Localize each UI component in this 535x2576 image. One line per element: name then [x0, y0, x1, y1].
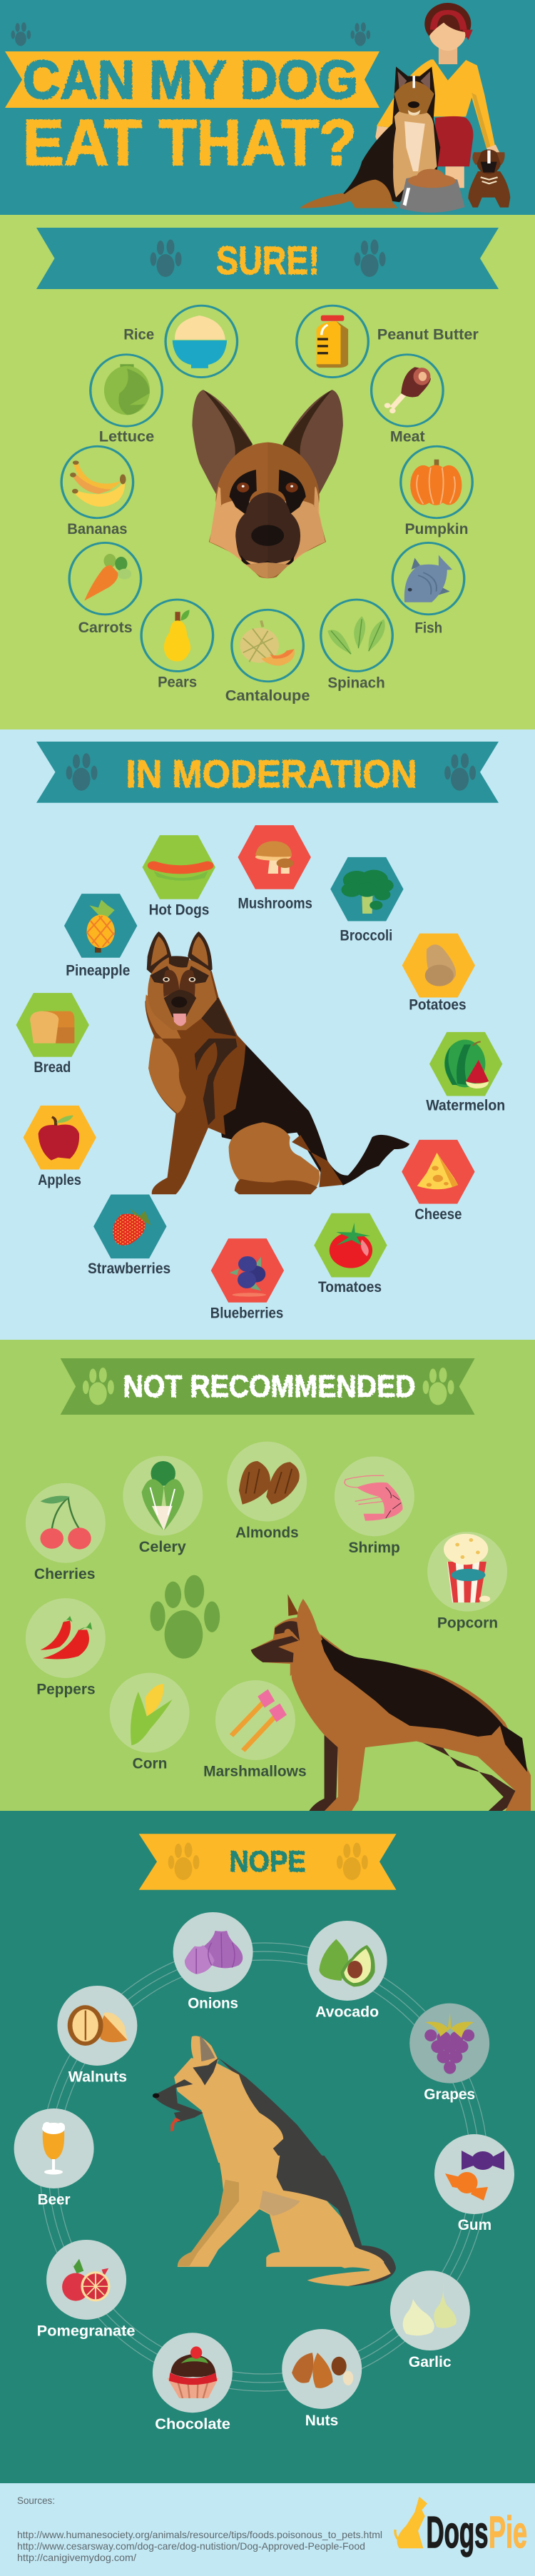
item: rice: Rice [123, 327, 154, 343]
item: cherries [26, 1483, 106, 1582]
section: sure [0, 215, 535, 729]
section: not recommended [0, 1340, 535, 1811]
heading banner: not recommended [61, 1358, 475, 1415]
item: peanut butter: Peanut Butter [377, 327, 479, 343]
item: beer [14, 2108, 94, 2208]
header section [0, 0, 535, 215]
item: lettuce [91, 355, 162, 445]
item: corn [110, 1673, 190, 1772]
item: pumpkin: Pumpkin [405, 521, 468, 537]
item: meat: Meat [390, 428, 425, 445]
item: grapes: Grapes [424, 2086, 475, 2103]
item: carrots: Carrots [78, 620, 133, 636]
icon: paw right [351, 22, 370, 46]
heading banner: sure: SURE! [216, 238, 320, 283]
item: garlic: Garlic [409, 2354, 452, 2370]
item: cheese: Cheese [414, 1206, 462, 1223]
item: corn: Corn [133, 1756, 167, 1772]
item: chocolate: Chocolate [155, 2416, 230, 2433]
item: blueberries [210, 1238, 284, 1322]
item: fish: Fish [414, 620, 442, 637]
item: cheese [402, 1140, 475, 1223]
sources heading: Sources: [17, 2495, 55, 2506]
heading banner: in moderation [36, 742, 499, 803]
title line one: CAN MY DOG [23, 50, 358, 111]
item: walnuts: Walnuts [68, 2069, 127, 2086]
icon: paw left [11, 22, 31, 46]
item: broccoli [330, 857, 404, 944]
item: apples: Apples [38, 1172, 81, 1188]
item: watermelon: Watermelon [426, 1097, 505, 1113]
item: apples [24, 1106, 96, 1188]
item: almonds [227, 1442, 307, 1541]
title line two: EAT THAT? [23, 107, 357, 179]
item: cherries: Cherries [34, 1566, 96, 1582]
title banner [5, 51, 379, 108]
item: cantaloupe: Cantaloupe [225, 687, 310, 704]
item: bread: Bread [34, 1059, 71, 1076]
item: hot dogs: Hot Dogs [149, 902, 209, 919]
item: pears [141, 600, 213, 691]
item: peanut butter [297, 305, 479, 378]
item: onions [173, 1912, 253, 2011]
item: mushrooms [238, 825, 312, 912]
sources list: http://www.cesarsway.com/dog-care/dog-nutistion/Dog-Approved-People-Food [17, 2540, 365, 2552]
item: avocado: Avocado [315, 2004, 379, 2021]
item: nuts [282, 2329, 362, 2429]
item: rice [123, 305, 238, 378]
item: potatoes [402, 934, 475, 1013]
item: pomegranate [37, 2240, 136, 2339]
item: bananas: Bananas [67, 521, 127, 537]
item: mushrooms: Mushrooms [238, 896, 312, 912]
item: popcorn: Popcorn [437, 1615, 498, 1632]
illustration: german shepherd head [192, 390, 343, 578]
item: walnuts [57, 1986, 137, 2086]
item: garlic [390, 2271, 470, 2370]
item: pumpkin [401, 446, 472, 537]
item: meat [372, 355, 443, 445]
item: celery: Celery [139, 1539, 186, 1555]
item: pears: Pears [158, 674, 197, 691]
section: nope [0, 1811, 535, 2483]
logo: dogspie: Dogs [427, 2508, 488, 2557]
heading banner: nope [139, 1834, 396, 1890]
item: shrimp [335, 1456, 414, 1556]
item: bananas [61, 446, 133, 537]
icon: large paw print [151, 1575, 220, 1659]
illustration: standing german shepherd [251, 1594, 531, 1811]
item: chocolate [153, 2333, 233, 2433]
section: in moderation [0, 729, 535, 1340]
item: broccoli: Broccoli [340, 928, 392, 944]
item: spinach [321, 600, 392, 692]
item: marshmallows: Marshmallows [203, 1763, 307, 1780]
ring lines connecting items [40, 1943, 488, 2391]
item: peppers [26, 1598, 106, 1697]
item: almonds: Almonds [235, 1525, 299, 1541]
item: avocado [307, 1921, 387, 2021]
illustration: woman with two dogs and food bowl [300, 3, 510, 213]
heading banner: nope: NOPE [230, 1844, 305, 1878]
footer section [0, 2483, 535, 2576]
illustration: sitting shepherd profile [153, 2036, 396, 2286]
item: pineapple: Pineapple [66, 963, 130, 979]
item: tomatoes [314, 1213, 387, 1295]
item: strawberries [88, 1194, 170, 1277]
item: fish [392, 542, 464, 637]
item: popcorn [427, 1532, 507, 1632]
item: potatoes: Potatoes [409, 996, 467, 1013]
sources list: http://www.humanesociety.org/animals/resource/tips/foods.poisonous_to_pets.html [17, 2529, 382, 2540]
item: shrimp: Shrimp [349, 1540, 400, 1556]
heading banner: not recommended: NOT RECOMMENDED [123, 1369, 415, 1404]
item: lettuce: Lettuce [99, 428, 154, 445]
item: beer: Beer [38, 2192, 71, 2208]
illustration: sitting german shepherd [145, 931, 409, 1194]
item: marshmallows [203, 1680, 307, 1780]
item: bread [16, 993, 89, 1076]
heading banner: in moderation: IN MODERATION [126, 752, 417, 796]
logo: dogspie [395, 2497, 527, 2557]
item: peppers: Peppers [36, 1682, 96, 1697]
item: nuts: Nuts [305, 2413, 338, 2429]
sources list [17, 2529, 382, 2563]
heading banner: sure [36, 228, 499, 289]
item: carrots [69, 542, 141, 636]
item: cantaloupe [225, 610, 310, 704]
item: strawberries: Strawberries [88, 1261, 170, 1277]
item: celery [123, 1456, 203, 1555]
item: grapes [409, 2004, 489, 2103]
item: gum: Gum [458, 2217, 491, 2233]
item: blueberries: Blueberries [210, 1305, 283, 1322]
item: hot dogs [143, 835, 215, 919]
item: watermelon [426, 1032, 505, 1113]
item: onions: Onions [188, 1995, 238, 2011]
item: gum [434, 2134, 514, 2233]
item: tomatoes: Tomatoes [318, 1279, 382, 1295]
item: pineapple [64, 894, 137, 979]
item: spinach: Spinach [327, 675, 385, 692]
sources list: http://canigivemydog.com/ [17, 2552, 136, 2563]
item: pomegranate: Pomegranate [37, 2323, 136, 2339]
